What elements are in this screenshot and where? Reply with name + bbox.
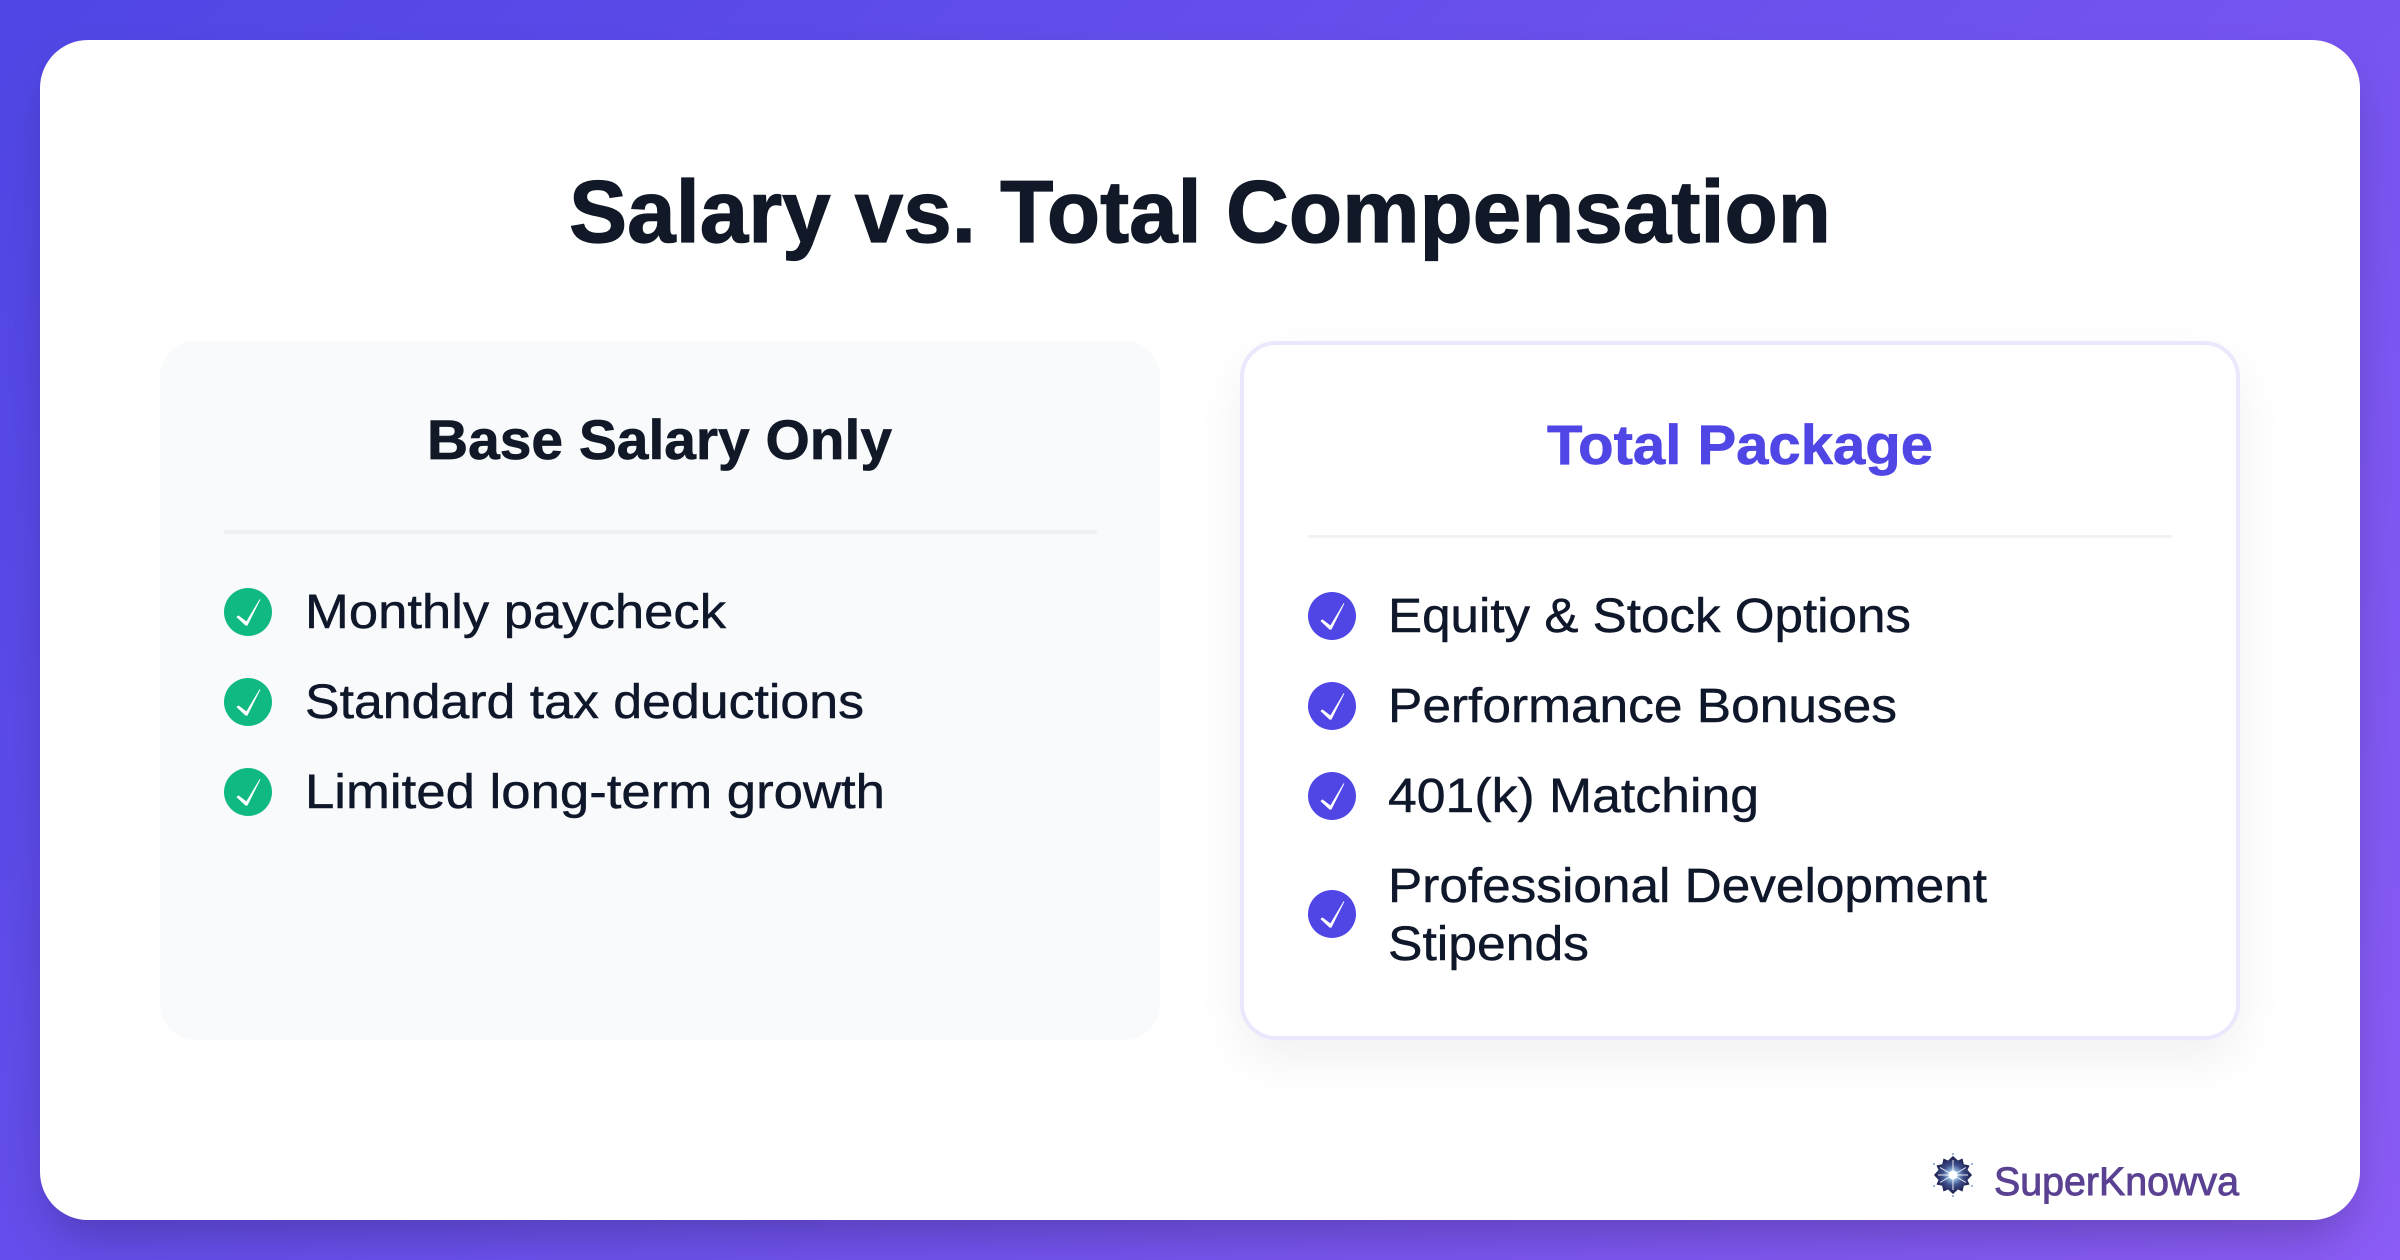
list item: limited long-term growth: Limited long-term growth <box>305 766 885 819</box>
panel: base salary background <box>160 341 1160 1040</box>
list item: monthly paycheck: Monthly paycheck <box>305 586 727 639</box>
panel: base salary content <box>224 408 1097 819</box>
list item: 401(k) matching: 401(k) Matching <box>1388 770 1759 823</box>
wordmark: SuperKnowva <box>1994 1160 2240 1204</box>
list item: standard tax deductions: Standard tax deductions <box>305 676 864 729</box>
list item: equity and stock options: Equity & Stock Options <box>1388 590 1911 643</box>
list item: performance bonuses: Performance Bonuses <box>1388 680 1897 733</box>
title: Salary vs. Total Compensation <box>569 162 1831 261</box>
list item: professional development stipends: Professional Development <box>1388 860 1987 913</box>
logo: SuperKnowva <box>1933 1153 2240 1204</box>
heading: total package: Total Package <box>1547 413 1933 476</box>
list item: professional development stipends <box>1308 860 1987 971</box>
heading: base salary only: Base Salary Only <box>427 408 892 471</box>
icon: star <box>1933 1153 1973 1197</box>
panel: total package background <box>1240 341 2240 1040</box>
list item: professional development stipends: Stipends <box>1388 918 1589 971</box>
panel: total package content <box>1308 413 2172 971</box>
